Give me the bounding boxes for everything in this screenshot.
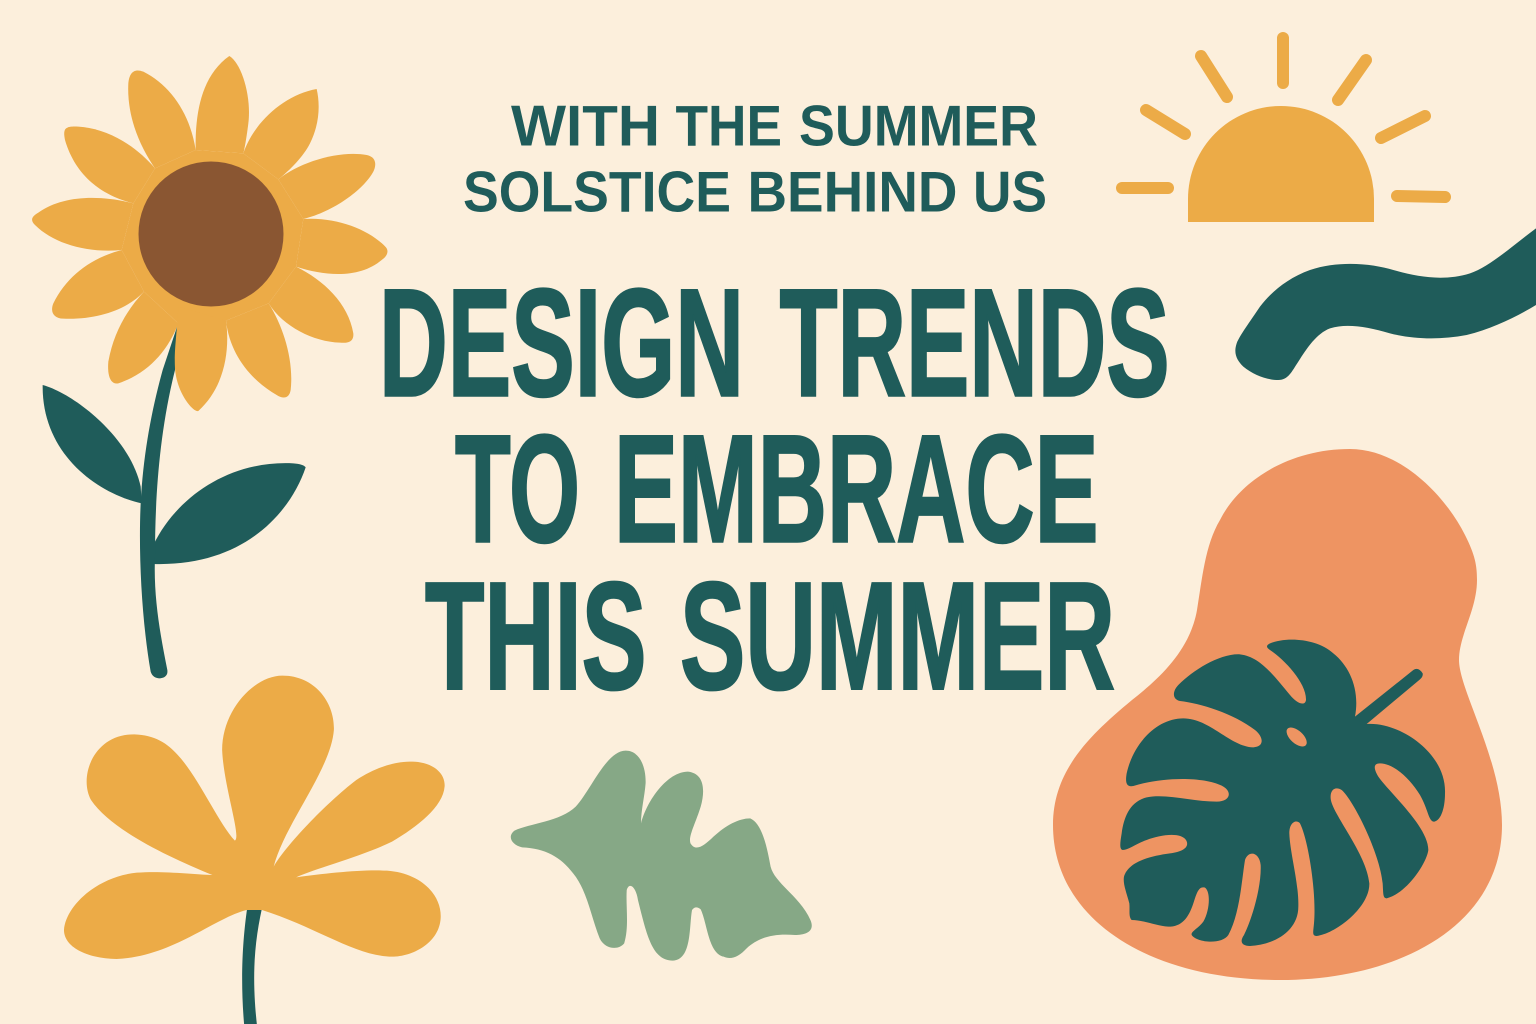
orange blob [1053, 449, 1502, 980]
wave shape [1235, 228, 1536, 380]
flower petals [64, 676, 445, 959]
front petal [175, 307, 227, 411]
title [379, 258, 1170, 722]
icon: sun [1122, 38, 1445, 222]
sunflower centre [138, 162, 284, 306]
subtitle: SUMMER [799, 95, 1038, 159]
title: SUMMER [680, 551, 1115, 722]
sun rays [1122, 38, 1445, 197]
title: TRENDS [780, 258, 1170, 428]
icon: monstera leaf [1120, 640, 1445, 946]
icon: sunflower [32, 56, 387, 678]
subtitle: SOLSTICE [463, 161, 731, 225]
title: EMBRACE [614, 404, 1098, 574]
subtitle: BEHIND [748, 161, 958, 225]
subtitle [463, 95, 1047, 225]
sun disc [1188, 106, 1374, 222]
icon: yellow flower [64, 676, 445, 1024]
sunflower leaves [43, 385, 306, 564]
sunflower stem [140, 324, 178, 678]
flower stem [242, 908, 262, 1024]
icon: sage green leaf [511, 751, 812, 961]
sunflower petals [32, 56, 387, 398]
title: TO [455, 404, 580, 574]
title: THIS [425, 551, 646, 722]
subtitle: WITH [511, 95, 660, 159]
title: DESIGN [379, 258, 744, 428]
orange blob with monstera leaf [1053, 449, 1502, 980]
subtitle: THE [676, 95, 782, 159]
subtitle: US [973, 161, 1047, 225]
